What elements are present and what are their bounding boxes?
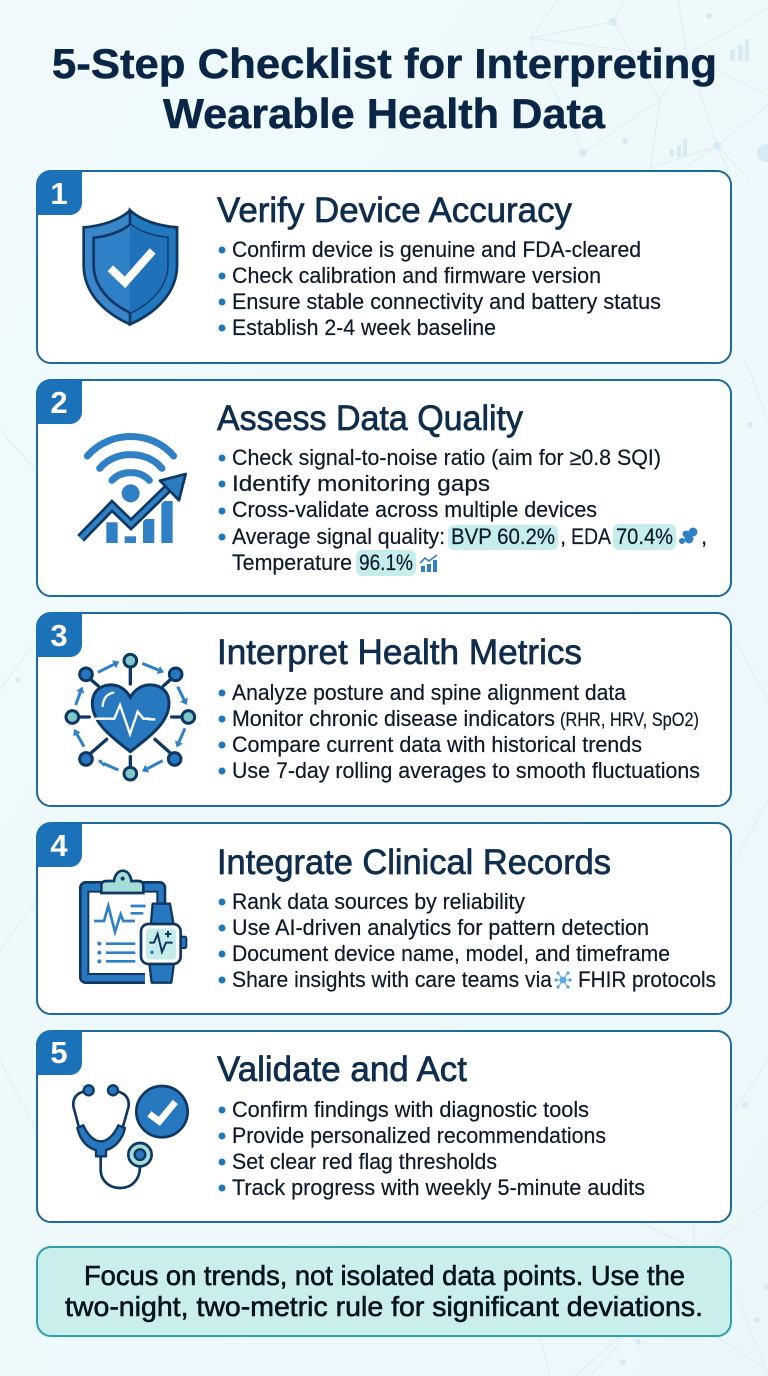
icon: wifi signal and rising chart xyxy=(81,436,186,543)
icon: shield with check xyxy=(84,210,177,324)
heading: Verify Device Accuracy xyxy=(217,191,572,230)
step number badge 4: 4 xyxy=(50,828,68,863)
bullet list: Share insights with care teams via xyxy=(232,967,553,992)
bullet list: Use AI-driven analytics for pattern detection xyxy=(232,915,649,940)
icon: stethoscope with check xyxy=(73,1085,188,1188)
icon: heart with connected nodes xyxy=(66,654,195,780)
step number badge 2 xyxy=(37,380,82,424)
bullet list: Confirm findings with diagnostic tools xyxy=(232,1097,589,1122)
bullet list: Analyze posture and spine alignment data xyxy=(232,680,627,705)
step number badge 1: 1 xyxy=(50,176,68,211)
bullet list: Compare current data with historical trends xyxy=(232,732,642,757)
bullet list: Track progress with weekly 5-minute audits xyxy=(232,1175,645,1200)
bullet list: Check calibration and firmware version xyxy=(232,263,601,288)
bullet list with signal quality values: EDA xyxy=(571,524,611,549)
bullet list: Ensure stable connectivity and battery status xyxy=(232,289,661,314)
icon: FHIR network xyxy=(555,972,571,988)
step number badge 5 xyxy=(37,1031,82,1075)
bullet list: Provide personalized recommendations xyxy=(232,1123,606,1148)
bullet list: Document device name, model, and timeframe xyxy=(232,941,670,966)
bullet list: Set clear red flag thresholds xyxy=(232,1149,497,1174)
bullet list with signal quality values: BVP 60.2% xyxy=(451,524,555,549)
bullet list: Confirm device is genuine and FDA-cleared xyxy=(232,237,641,262)
step number badge 2: 2 xyxy=(50,385,68,420)
panel: step 4 integrate clinical records xyxy=(37,823,731,1014)
bullet list with signal quality values: , xyxy=(560,524,566,549)
bullet list xyxy=(218,889,716,992)
bullet list with signal quality values: Temperature xyxy=(232,550,352,575)
bullet list: Establish 2-4 week baseline xyxy=(232,315,496,340)
panel: step 3 interpret health metrics xyxy=(37,613,731,806)
icon: clipboard with smartwatch xyxy=(80,871,186,987)
bullet list with signal quality values xyxy=(218,445,707,576)
bullet list with signal quality values: 70.4% xyxy=(616,524,673,549)
step number badge 5: 5 xyxy=(50,1035,68,1070)
heading: Interpret Health Metrics xyxy=(217,633,582,672)
bullet list with signal quality values: Average signal quality: xyxy=(232,524,445,549)
bullet list with signal quality values: , xyxy=(701,524,707,549)
callout: key takeaway: two-night, two-metric rule for significant deviations. xyxy=(65,1291,703,1322)
step number badge 3 xyxy=(37,613,82,657)
bullet list xyxy=(218,237,661,340)
panel: step 5 validate and act xyxy=(37,1031,731,1222)
callout: key takeaway: Focus on trends, not isolated data points. Use the xyxy=(84,1260,685,1291)
bullet list: (RHR, HRV, SpO2) xyxy=(560,710,699,731)
bullet list xyxy=(218,680,700,783)
bullet list: FHIR protocols xyxy=(578,967,716,992)
heading: Assess Data Quality xyxy=(217,399,523,438)
panel: step 1 verify device accuracy xyxy=(37,171,731,363)
title: Wearable Health Data xyxy=(163,90,606,137)
title xyxy=(52,40,717,137)
step number badge 4 xyxy=(37,823,82,867)
bullet list xyxy=(218,1097,645,1200)
bullet list: Monitor chronic disease indicators xyxy=(232,706,555,731)
step number badge 1 xyxy=(37,171,82,215)
bullet list with signal quality values: Check signal-to-noise ratio (aim for ≥0.8 SQI) xyxy=(232,445,661,470)
icon: EDA molecule xyxy=(679,528,698,544)
title: 5-Step Checklist for Interpreting xyxy=(52,40,717,87)
bullet list with signal quality values: Cross-validate across multiple devices xyxy=(232,497,597,522)
step number badge 3: 3 xyxy=(50,618,68,653)
bullet list with signal quality values: Identify monitoring gaps xyxy=(232,471,490,496)
bullet list: Rank data sources by reliability xyxy=(232,889,525,914)
icon: small rising chart xyxy=(420,555,437,572)
panel: step 2 assess data quality xyxy=(37,380,731,596)
heading: Validate and Act xyxy=(217,1050,467,1089)
callout: key takeaway xyxy=(37,1247,731,1336)
heading: Integrate Clinical Records xyxy=(217,843,611,882)
bullet list with signal quality values: 96.1% xyxy=(359,550,413,575)
bullet list: Use 7-day rolling averages to smooth fluctuations xyxy=(232,758,700,783)
